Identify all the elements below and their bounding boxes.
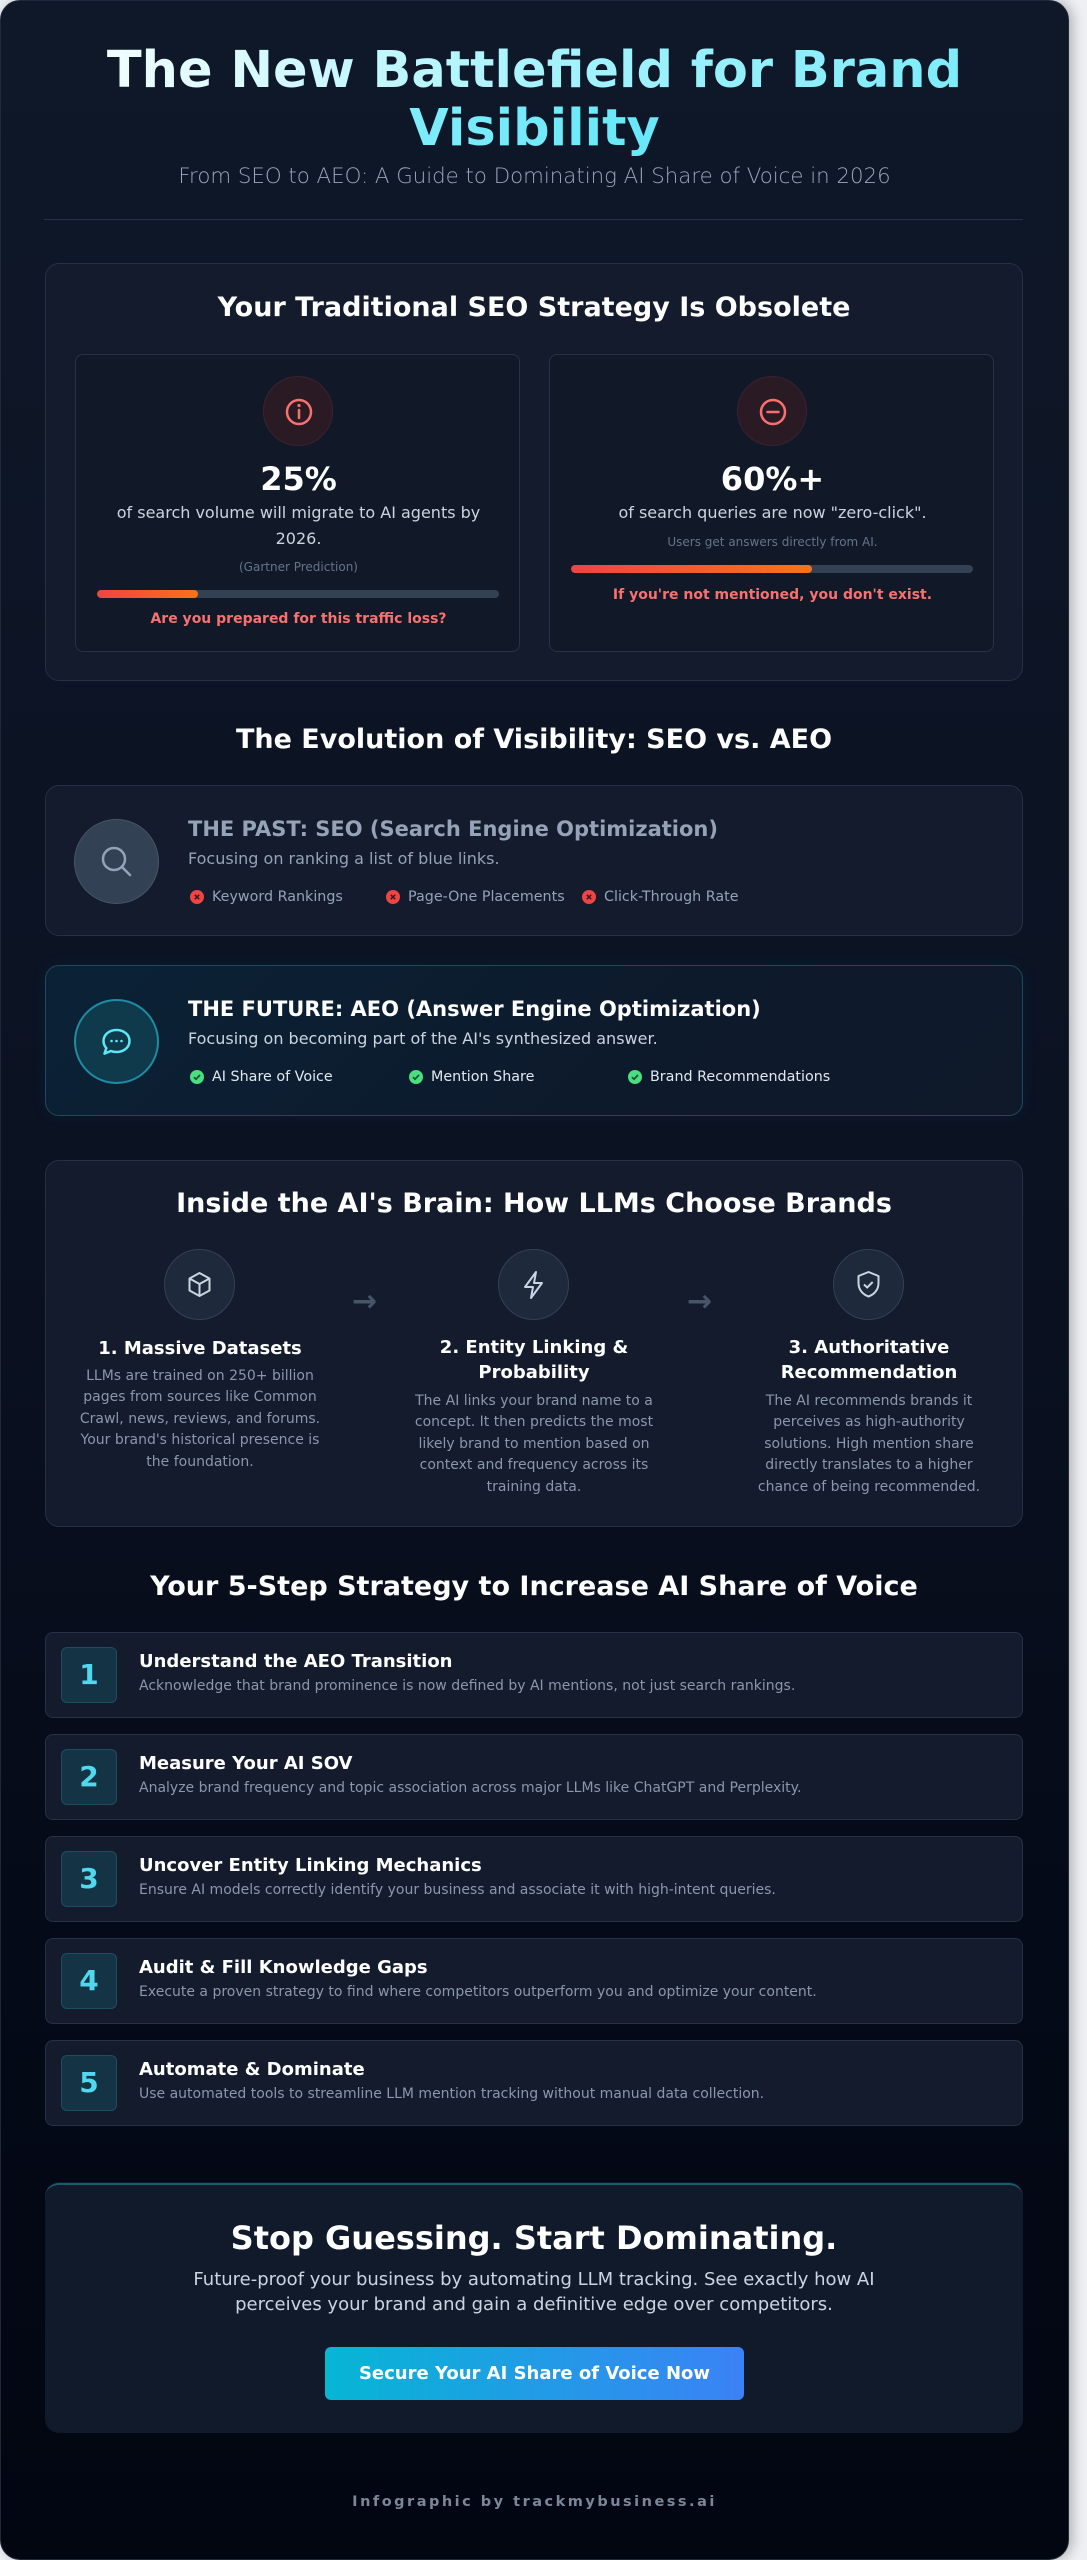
icon: cube bbox=[164, 1249, 235, 1320]
CTA title: Stop Guessing. Start Dominating. bbox=[231, 2219, 837, 2257]
past title: THE PAST: SEO (Search Engine Optimization) bbox=[188, 817, 718, 841]
past description: Focusing on ranking a list of blue links. bbox=[188, 849, 500, 868]
stat card: 60% bbox=[549, 354, 994, 652]
future tags: Mention Share bbox=[431, 1069, 534, 1085]
icon: minus bbox=[737, 376, 807, 446]
stat value: 25% bbox=[260, 460, 337, 498]
panel: past SEO bbox=[45, 785, 1023, 936]
step 5: Automate & Dominate bbox=[139, 2059, 365, 2080]
step 2: Measure Your AI SOV bbox=[139, 1753, 352, 1774]
footer: Infographic by trackmybusiness.ai bbox=[352, 2494, 717, 2510]
arrow: → bbox=[687, 1284, 712, 1319]
title bbox=[107, 41, 962, 158]
stat value: 60%+ bbox=[721, 460, 824, 498]
step 5 bbox=[45, 2040, 1023, 2126]
step column 2 bbox=[415, 1249, 653, 1495]
progress bar 60% bbox=[571, 565, 973, 573]
step 1: Acknowledge that brand prominence is now defined by AI mentions, not just search rankings. bbox=[139, 1678, 795, 1694]
step 1 bbox=[45, 1632, 1023, 1718]
future tags: AI Share of Voice bbox=[212, 1069, 333, 1085]
step 2 bbox=[45, 1734, 1023, 1820]
callout: If you're not mentioned, you don't exist. bbox=[613, 587, 932, 603]
title: The New Battlefield for Brand bbox=[107, 41, 962, 100]
source note: (Gartner Prediction) bbox=[239, 560, 358, 574]
icon: chat bubble bbox=[74, 999, 159, 1084]
icon: shield check bbox=[833, 1249, 904, 1320]
past tags: Page-One Placements bbox=[408, 889, 565, 905]
step 3: Ensure AI models correctly identify your business and associate it with high-intent queries. bbox=[139, 1882, 776, 1898]
future description: Focusing on becoming part of the AI's synthesized answer. bbox=[188, 1029, 658, 1048]
heading: 5-step strategy: Your 5-Step Strategy to Increase AI Share of Voice bbox=[150, 1571, 918, 1602]
description: LLMs are trained on 250+ billion pages from sources like Common Crawl, news, reviews, and forums. Your brand's historical presence is the foundation. bbox=[80, 1368, 320, 1470]
future title: THE FUTURE: AEO (Answer Engine Optimization) bbox=[188, 997, 761, 1021]
description: The AI recommends brands it perceives as high-authority solutions. High mention share directly translates to a higher chance of being recommended. bbox=[758, 1393, 980, 1495]
CTA description: Future-proof your business by automating LLM tracking. See exactly how AI perceives your brand and gain a definitive edge over competitors. bbox=[193, 2269, 875, 2315]
icon: lightning bbox=[498, 1249, 569, 1320]
step column 3 bbox=[758, 1249, 980, 1495]
panel: future AEO bbox=[45, 965, 1023, 1116]
heading: evolution: The Evolution of Visibility: SEO vs. AEO bbox=[236, 724, 832, 755]
title: 3. Authoritative Recommendation bbox=[781, 1337, 957, 1383]
step 5: Use automated tools to streamline LLM mention tracking without manual data collection. bbox=[139, 2086, 764, 2102]
CTA button: Secure Your AI Share of Voice Now bbox=[359, 2363, 710, 2384]
progress bar 25% bbox=[97, 590, 499, 598]
step 3: Uncover Entity Linking Mechanics bbox=[139, 1855, 482, 1876]
callout: Are you prepared for this traffic loss? bbox=[150, 611, 447, 627]
step 5: 5 bbox=[79, 2066, 99, 2099]
step 1: Understand the AEO Transition bbox=[139, 1651, 452, 1672]
heading: obsolete: Your Traditional SEO Strategy Is Obsolete bbox=[218, 292, 850, 323]
title: Visibility bbox=[409, 99, 660, 158]
step 1: 1 bbox=[79, 1658, 99, 1691]
panel: CTA bbox=[45, 2183, 1023, 2433]
past tags bbox=[190, 889, 739, 905]
stat description: of search volume will migrate to AI agents by 2026. bbox=[117, 503, 480, 548]
future tags bbox=[190, 1069, 830, 1085]
step 2: 2 bbox=[79, 1760, 99, 1793]
future tags: Brand Recommendations bbox=[650, 1069, 830, 1085]
past tags: Click-Through Rate bbox=[604, 889, 739, 905]
stat description: of search queries are now "zero-click". bbox=[618, 503, 927, 522]
stat card: 25% bbox=[75, 354, 520, 652]
step 3: 3 bbox=[79, 1862, 99, 1895]
title: 2. Entity Linking & Probability bbox=[440, 1337, 628, 1383]
heading: brain: Inside the AI's Brain: How LLMs Choose Brands bbox=[176, 1188, 892, 1219]
icon: info bbox=[263, 376, 333, 446]
panel: inside the AI's brain bbox=[45, 1160, 1023, 1527]
note: Users get answers directly from AI. bbox=[667, 535, 878, 549]
CTA button bbox=[325, 2347, 744, 2400]
step 3 bbox=[45, 1836, 1023, 1922]
step 4 bbox=[45, 1938, 1023, 2024]
description: The AI links your brand name to a concept. It then predicts the most likely brand to mention based on context and frequency across its training data. bbox=[415, 1393, 653, 1495]
arrow: → bbox=[352, 1284, 377, 1319]
past tags: Keyword Rankings bbox=[212, 889, 343, 905]
subtitle: From SEO to AEO: A Guide to Dominating AI Share of Voice in 2026 bbox=[178, 164, 891, 189]
step 4: 4 bbox=[79, 1964, 99, 1997]
step 2: Analyze brand frequency and topic association across major LLMs like ChatGPT and Perplexity. bbox=[139, 1780, 801, 1796]
step 4: Execute a proven strategy to find where competitors outperform you and optimize your content. bbox=[139, 1984, 817, 2000]
panel: obsolete SEO bbox=[45, 263, 1023, 681]
step column 1 bbox=[80, 1249, 320, 1470]
icon: search bbox=[74, 819, 159, 904]
step 4: Audit & Fill Knowledge Gaps bbox=[139, 1957, 428, 1978]
title: 1. Massive Datasets bbox=[98, 1338, 302, 1359]
